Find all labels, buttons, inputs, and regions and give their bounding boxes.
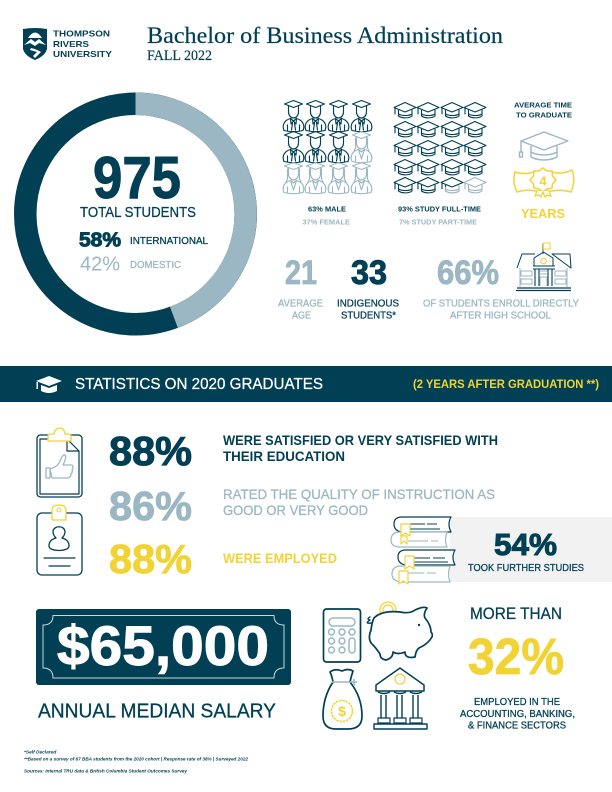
- icon: money bag: [323, 670, 362, 729]
- stat: finance sector employment: & FINANCE SECTORS: [468, 720, 566, 732]
- banknote: median salary: [36, 609, 291, 685]
- further studies figure: 54%: [494, 527, 557, 562]
- icon: diploma with number 4: 4: [539, 174, 547, 188]
- icon: diploma with number 4: [514, 168, 574, 197]
- stat: indigenous students: [337, 254, 399, 322]
- stat: quality of instruction: 86%: [109, 483, 192, 529]
- banner note: (2 YEARS AFTER GRADUATION **): [413, 379, 599, 391]
- domestic share: [80, 254, 181, 276]
- banner: statistics on 2020 graduates: [0, 366, 612, 402]
- pictogram: male vs female: [283, 100, 372, 194]
- heading: average time to graduate: [514, 100, 572, 120]
- stat: enroll directly after high school: OF STUDENTS ENROLL DIRECTLY: [423, 298, 579, 310]
- stat: satisfied with education: THEIR EDUCATION: [223, 448, 345, 464]
- stat: enroll directly after high school: [423, 254, 579, 322]
- icon: graduation cap: [520, 132, 568, 160]
- icon: stack of books: [391, 517, 455, 584]
- heading: average time to graduate: TO GRADUATE: [516, 110, 572, 120]
- stat: satisfied with education: 88%: [109, 428, 192, 474]
- stat: indigenous students: STUDENTS*: [341, 310, 396, 322]
- logo wordmark: RIVERS: [53, 39, 89, 49]
- subtitle: FALL 2022: [147, 48, 212, 64]
- panel: further studies: [391, 517, 612, 584]
- stat: finance sector employment: 32%: [468, 628, 564, 685]
- stat: average age: AGE: [292, 310, 311, 322]
- icon: bank: [374, 668, 427, 729]
- total students: 975: [93, 145, 181, 211]
- logo shield: [23, 28, 47, 60]
- stat: quality of instruction: [109, 483, 495, 529]
- logo wordmark: THOMPSON: [53, 28, 110, 38]
- stat: satisfied with education: WERE SATISFIED OR VERY SATISFIED WITH: [223, 432, 498, 448]
- icon: piggy bank: [367, 602, 432, 660]
- stat: finance sector employment: EMPLOYED IN THE: [474, 697, 560, 708]
- stat: finance sector employment: ACCOUNTING, BANKING,: [460, 709, 575, 720]
- logo: Thompson Rivers University: [23, 28, 112, 60]
- footnotes and source: **Based on a survey of 67 BBA students from the 2020 cohort | Response rate of 38% | Surveyed 2022: [24, 756, 248, 762]
- label: part-time share: 7% STUDY PART-TIME: [399, 218, 477, 226]
- stat: average age: 21: [285, 254, 317, 292]
- icon: id badge: [37, 505, 82, 575]
- logo wordmark: UNIVERSITY: [53, 49, 112, 59]
- stat: indigenous students: INDIGENOUS: [337, 298, 399, 310]
- salary label: ANNUAL MEDIAN SALARY: [38, 700, 276, 722]
- stat: employed: 88%: [109, 536, 192, 582]
- banknote: median salary: $65,000: [57, 614, 269, 677]
- title: Bachelor of Business Administration: [147, 23, 504, 48]
- logo wordmark: [53, 28, 112, 59]
- label: full-time share: 93% STUDY FULL-TIME: [398, 204, 481, 214]
- international share: INTERNATIONAL: [130, 236, 208, 247]
- icon: calculator: [324, 609, 360, 662]
- stat: finance sector employment: MORE THAN: [470, 605, 562, 623]
- pictogram: full-time vs part-time: [394, 102, 486, 193]
- stat: average age: AVERAGE: [278, 298, 323, 310]
- label: male share: 63% MALE: [308, 204, 346, 214]
- footnotes and source: [24, 750, 248, 774]
- stat: satisfied with education: [109, 428, 498, 474]
- stat: employed: [109, 536, 337, 582]
- stat: average age: [278, 254, 323, 322]
- stat: finance sector employment: [460, 605, 575, 732]
- years label: YEARS: [521, 206, 565, 221]
- total students: TOTAL STUDENTS: [80, 204, 196, 221]
- international share: 58%: [79, 230, 121, 252]
- banner heading: STATISTICS ON 2020 GRADUATES: [75, 376, 323, 393]
- donut chart: international vs domestic: [25, 104, 246, 324]
- heading: average time to graduate: AVERAGE TIME: [514, 100, 572, 110]
- domestic share: DOMESTIC: [130, 260, 181, 271]
- label: female share: 37% FEMALE: [302, 218, 350, 226]
- international share: [79, 230, 208, 252]
- stat: quality of instruction: GOOD OR VERY GOOD: [223, 502, 368, 518]
- icon: banner graduation cap: [36, 376, 62, 393]
- stat: enroll directly after high school: 66%: [437, 254, 499, 292]
- stat: enroll directly after high school: AFTER HIGH SCHOOL: [450, 310, 551, 322]
- stat: employed: WERE EMPLOYED: [223, 550, 337, 566]
- stat: quality of instruction: RATED THE QUALITY OF INSTRUCTION AS: [223, 486, 495, 502]
- icon: money bag: $: [338, 703, 346, 719]
- footnotes and source: *Self Declared: [24, 750, 57, 756]
- stat: indigenous students: 33: [351, 254, 387, 292]
- icon: school building: [516, 243, 571, 290]
- footnotes and source: Sources: Internal TRU data & British Columbia Student Outcomes Survey: [24, 768, 187, 774]
- further studies label: TOOK FURTHER STUDIES: [468, 563, 584, 574]
- icon: clipboard with thumbs up: [37, 428, 82, 497]
- domestic share: 42%: [80, 254, 120, 276]
